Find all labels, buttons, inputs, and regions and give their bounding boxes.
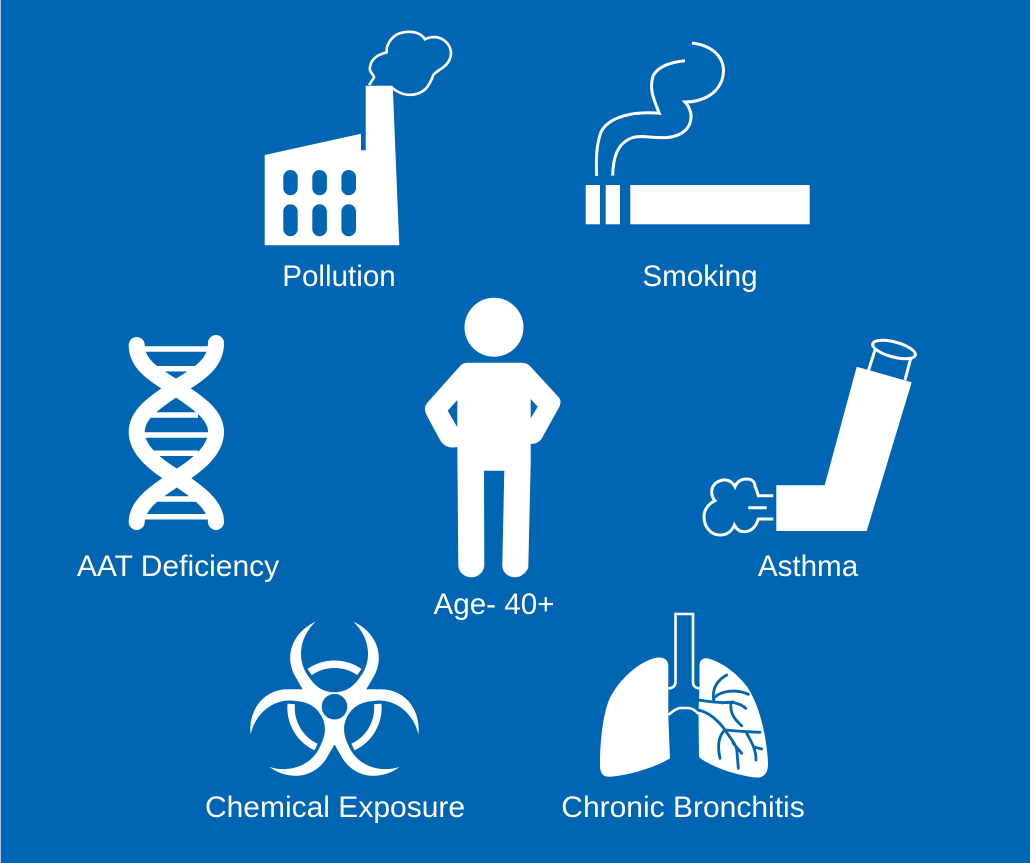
right lung (698, 658, 768, 778)
trachea outline (668, 614, 700, 688)
icon: standing person (Age) (425, 298, 561, 577)
icon: biohazard symbol (Chemical Exposure) (238, 622, 431, 789)
label: AAT Deficiency: AAT Deficiency (77, 550, 279, 583)
label: Pollution: Pollution (282, 260, 396, 293)
label: Asthma: Asthma (758, 550, 859, 583)
label: Chronic Bronchitis: Chronic Bronchitis (561, 791, 805, 824)
icon: cigarette with smoke (Smoking) (586, 43, 810, 224)
left lung (600, 657, 670, 777)
bronchial branches (698, 675, 762, 768)
label: Chemical Exposure: Chemical Exposure (205, 791, 465, 824)
icon: DNA double helix (AAT Deficiency) (137, 343, 216, 522)
label: Smoking: Smoking (642, 260, 758, 293)
icon: lungs with bronchi (Chronic Bronchitis) (600, 614, 768, 778)
label: Age- 40+: Age- 40+ (434, 588, 554, 621)
icon: inhaler (Asthma) (704, 337, 917, 535)
lower bronchus outline (668, 708, 698, 715)
icon: factory with smoke (Pollution) (265, 32, 451, 245)
